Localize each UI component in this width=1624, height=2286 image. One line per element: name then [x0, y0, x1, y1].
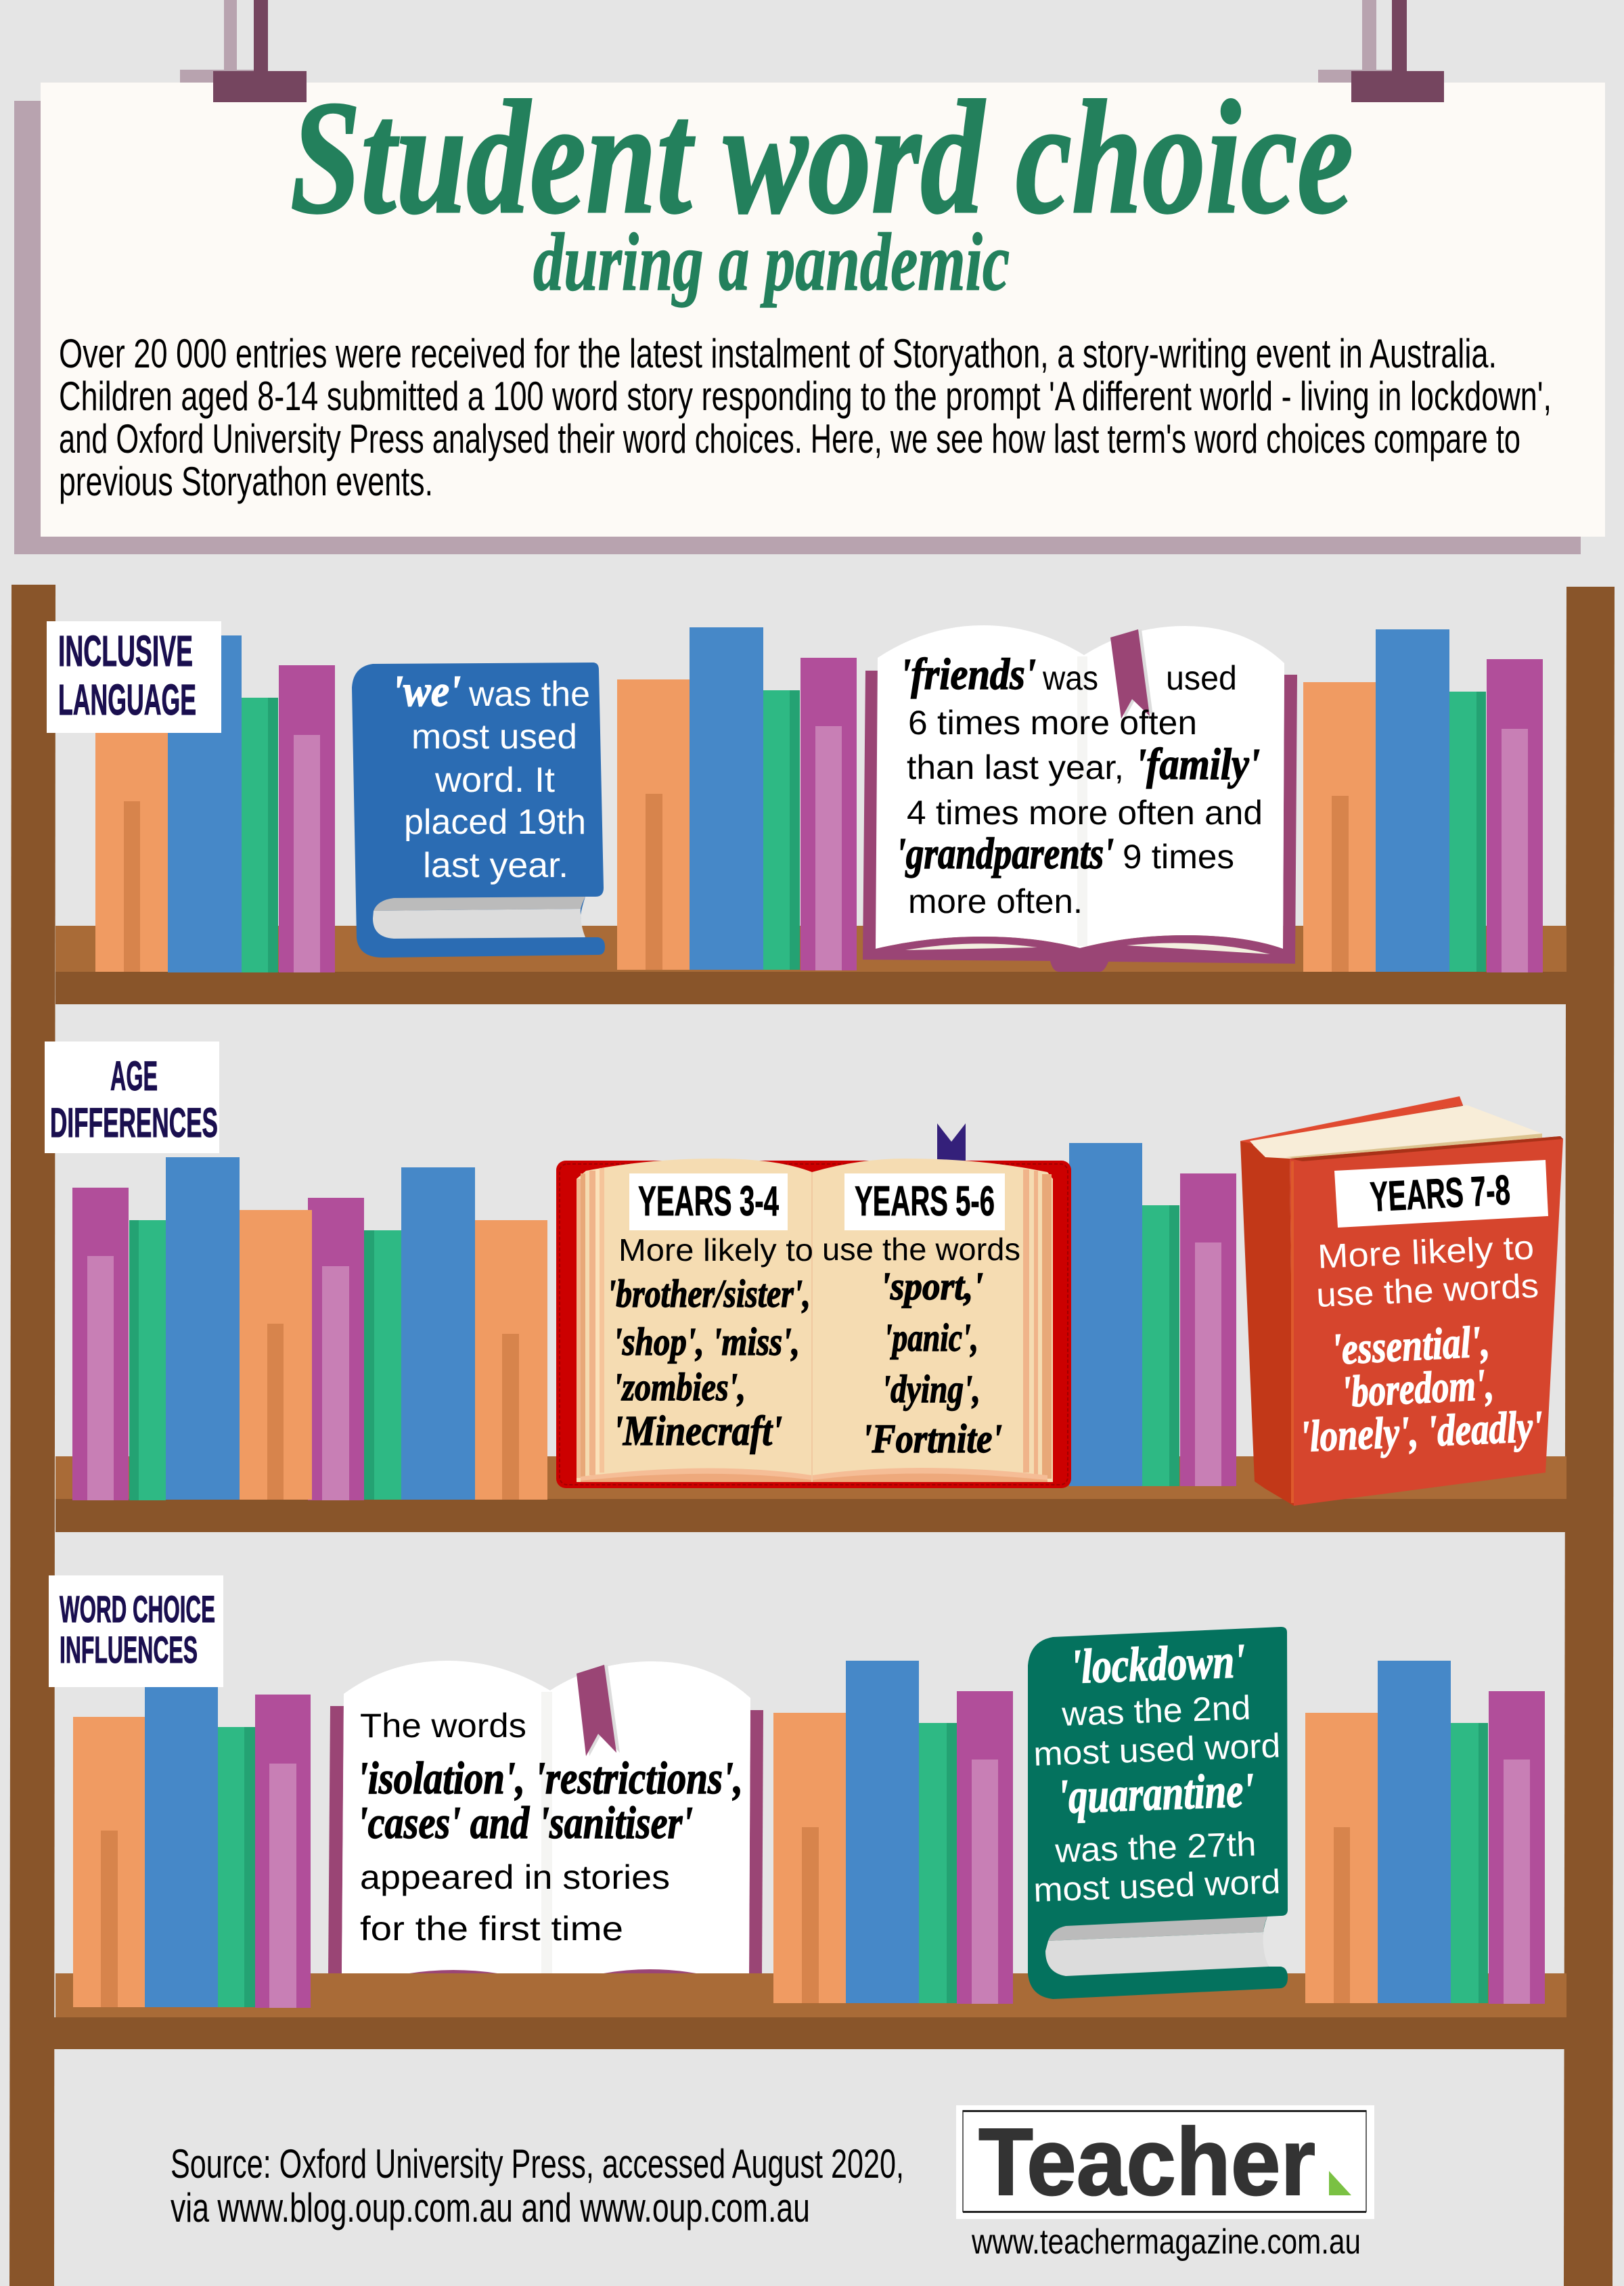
shelf 3: books left	[73, 1678, 311, 2008]
left page words	[607, 1232, 813, 1454]
left page words: 'Minecraft'	[613, 1408, 782, 1454]
shelf 2: open red book	[556, 1123, 1071, 1488]
blue book text	[392, 667, 590, 885]
label: inclusive language: INCLUSIVE	[58, 627, 193, 675]
green book text: was the 27th	[1054, 1825, 1257, 1870]
green book text: was the 2nd	[1060, 1688, 1251, 1733]
blue book text: placed 19th	[404, 803, 586, 842]
right page words: 'Fortnite'	[862, 1416, 1002, 1461]
years 5-6: YEARS 5-6	[855, 1178, 995, 1225]
shelf 2: books right	[1069, 1143, 1236, 1486]
new words text: The words	[360, 1707, 526, 1745]
header panel	[14, 67, 1605, 554]
label: age differences	[45, 1041, 219, 1153]
bookmark	[577, 1665, 620, 1756]
years 7-8 words	[1299, 1228, 1543, 1462]
source text: Source: Oxford University Press, accessed August 2020,	[171, 2141, 904, 2187]
shelf 2: books left	[72, 1157, 547, 1500]
open book text	[896, 650, 1263, 920]
years 7-8 label: YEARS 7-8	[1369, 1167, 1511, 1221]
years 7-8 words: use the words	[1315, 1267, 1539, 1314]
green book text: most used word	[1033, 1862, 1281, 1909]
bookcase frame	[9, 585, 1615, 2286]
years 7-8 label	[1334, 1160, 1548, 1228]
green book text: 'lockdown'	[1070, 1634, 1246, 1694]
green book text: most used word	[1033, 1726, 1281, 1773]
shelf 1: books left	[95, 635, 335, 972]
blue book text: 'we'	[392, 667, 461, 716]
years 7-8 words: 'boredom',	[1340, 1360, 1495, 1417]
open book text: used	[1166, 659, 1237, 697]
open book text: 9 times	[1123, 838, 1234, 876]
new words text: 'isolation', 'restrictions',	[357, 1752, 743, 1803]
label: inclusive language: LANGUAGE	[58, 675, 196, 724]
new words text: appeared in stories	[360, 1858, 670, 1896]
left page words: More likely to	[618, 1232, 813, 1268]
blue book text: word. It	[434, 761, 556, 800]
shelf 3 board	[54, 1973, 1566, 2049]
new words text: 'cases' and 'sanitiser'	[357, 1797, 693, 1848]
shelf 3: books right	[1305, 1661, 1545, 2004]
shelf 3: green book with lockdown text	[1028, 1627, 1288, 1999]
left page words: 'shop', 'miss',	[613, 1320, 800, 1364]
label: word choice influences: INFLUENCES	[60, 1628, 198, 1671]
title: Student word choice	[290, 67, 1353, 247]
label: word choice influences: WORD CHOICE	[60, 1588, 215, 1630]
years 7-8 words: More likely to	[1317, 1228, 1535, 1276]
label: word choice influences	[49, 1575, 223, 1687]
right page words: 'sport,'	[880, 1264, 983, 1308]
shelf 3: open book with new words	[328, 1661, 763, 1976]
open book text: 'family'	[1135, 740, 1260, 789]
new words text: for the first time	[360, 1910, 623, 1948]
open book text: 4 times more often and	[907, 794, 1263, 832]
teacher logo: Teacher	[978, 2108, 1315, 2215]
new words text	[357, 1707, 743, 1948]
label: age differences: AGE	[110, 1053, 158, 1099]
years 7-8 words: 'essential',	[1330, 1317, 1491, 1374]
right page words: use the words	[822, 1232, 1020, 1267]
open book text: more often.	[908, 882, 1083, 920]
open book text: 'friends'	[900, 650, 1036, 699]
left page words: 'brother/sister',	[607, 1272, 811, 1316]
right page words	[822, 1232, 1020, 1461]
years 7-8 words: 'lonely', 'deadly'	[1299, 1402, 1543, 1462]
blue book text: was the	[468, 675, 590, 714]
hanging straps and clips	[180, 0, 1407, 85]
shelf 1: books right	[1303, 629, 1543, 972]
open book text: was	[1042, 659, 1098, 697]
left page words: 'zombies',	[613, 1365, 746, 1409]
intro text	[59, 331, 1552, 504]
open book text: than last year,	[907, 748, 1124, 786]
blue book text: most used	[411, 717, 577, 757]
label: inclusive language	[47, 621, 221, 733]
open book text: 'grandparents'	[896, 829, 1114, 878]
right page words: 'panic',	[884, 1316, 978, 1360]
shelf 3: books middle	[773, 1661, 1013, 2004]
green book text	[1033, 1634, 1281, 1909]
shelf 1: blue book with 'we' text	[352, 663, 605, 958]
ribbon bookmark	[937, 1123, 966, 1161]
blue book text: last year.	[423, 846, 568, 885]
source text: via www.blog.oup.com.au and www.oup.com.au	[171, 2185, 810, 2231]
website: www.teachermagazine.com.au	[971, 2222, 1361, 2262]
source text	[171, 2141, 904, 2231]
years 3-4: YEARS 3-4	[638, 1178, 779, 1225]
subtitle: during a pandemic	[533, 217, 1010, 308]
right page words: 'dying',	[882, 1367, 980, 1411]
years 3-4	[629, 1173, 788, 1230]
shelf 2: standing red book years 7-8	[1240, 1096, 1563, 1506]
label: age differences: DIFFERENCES	[50, 1100, 218, 1146]
shelf 1: open book with 'friends' text	[863, 625, 1297, 972]
left clip	[213, 71, 307, 102]
bookmark	[1110, 629, 1153, 719]
right clip	[1351, 71, 1444, 102]
green book text: 'quarantine'	[1057, 1763, 1255, 1824]
years 5-6	[844, 1173, 1005, 1230]
open book text: 6 times more often	[908, 704, 1197, 742]
intro text: previous Storyathon events.	[59, 459, 433, 504]
shelf 1: books middle	[617, 627, 857, 970]
